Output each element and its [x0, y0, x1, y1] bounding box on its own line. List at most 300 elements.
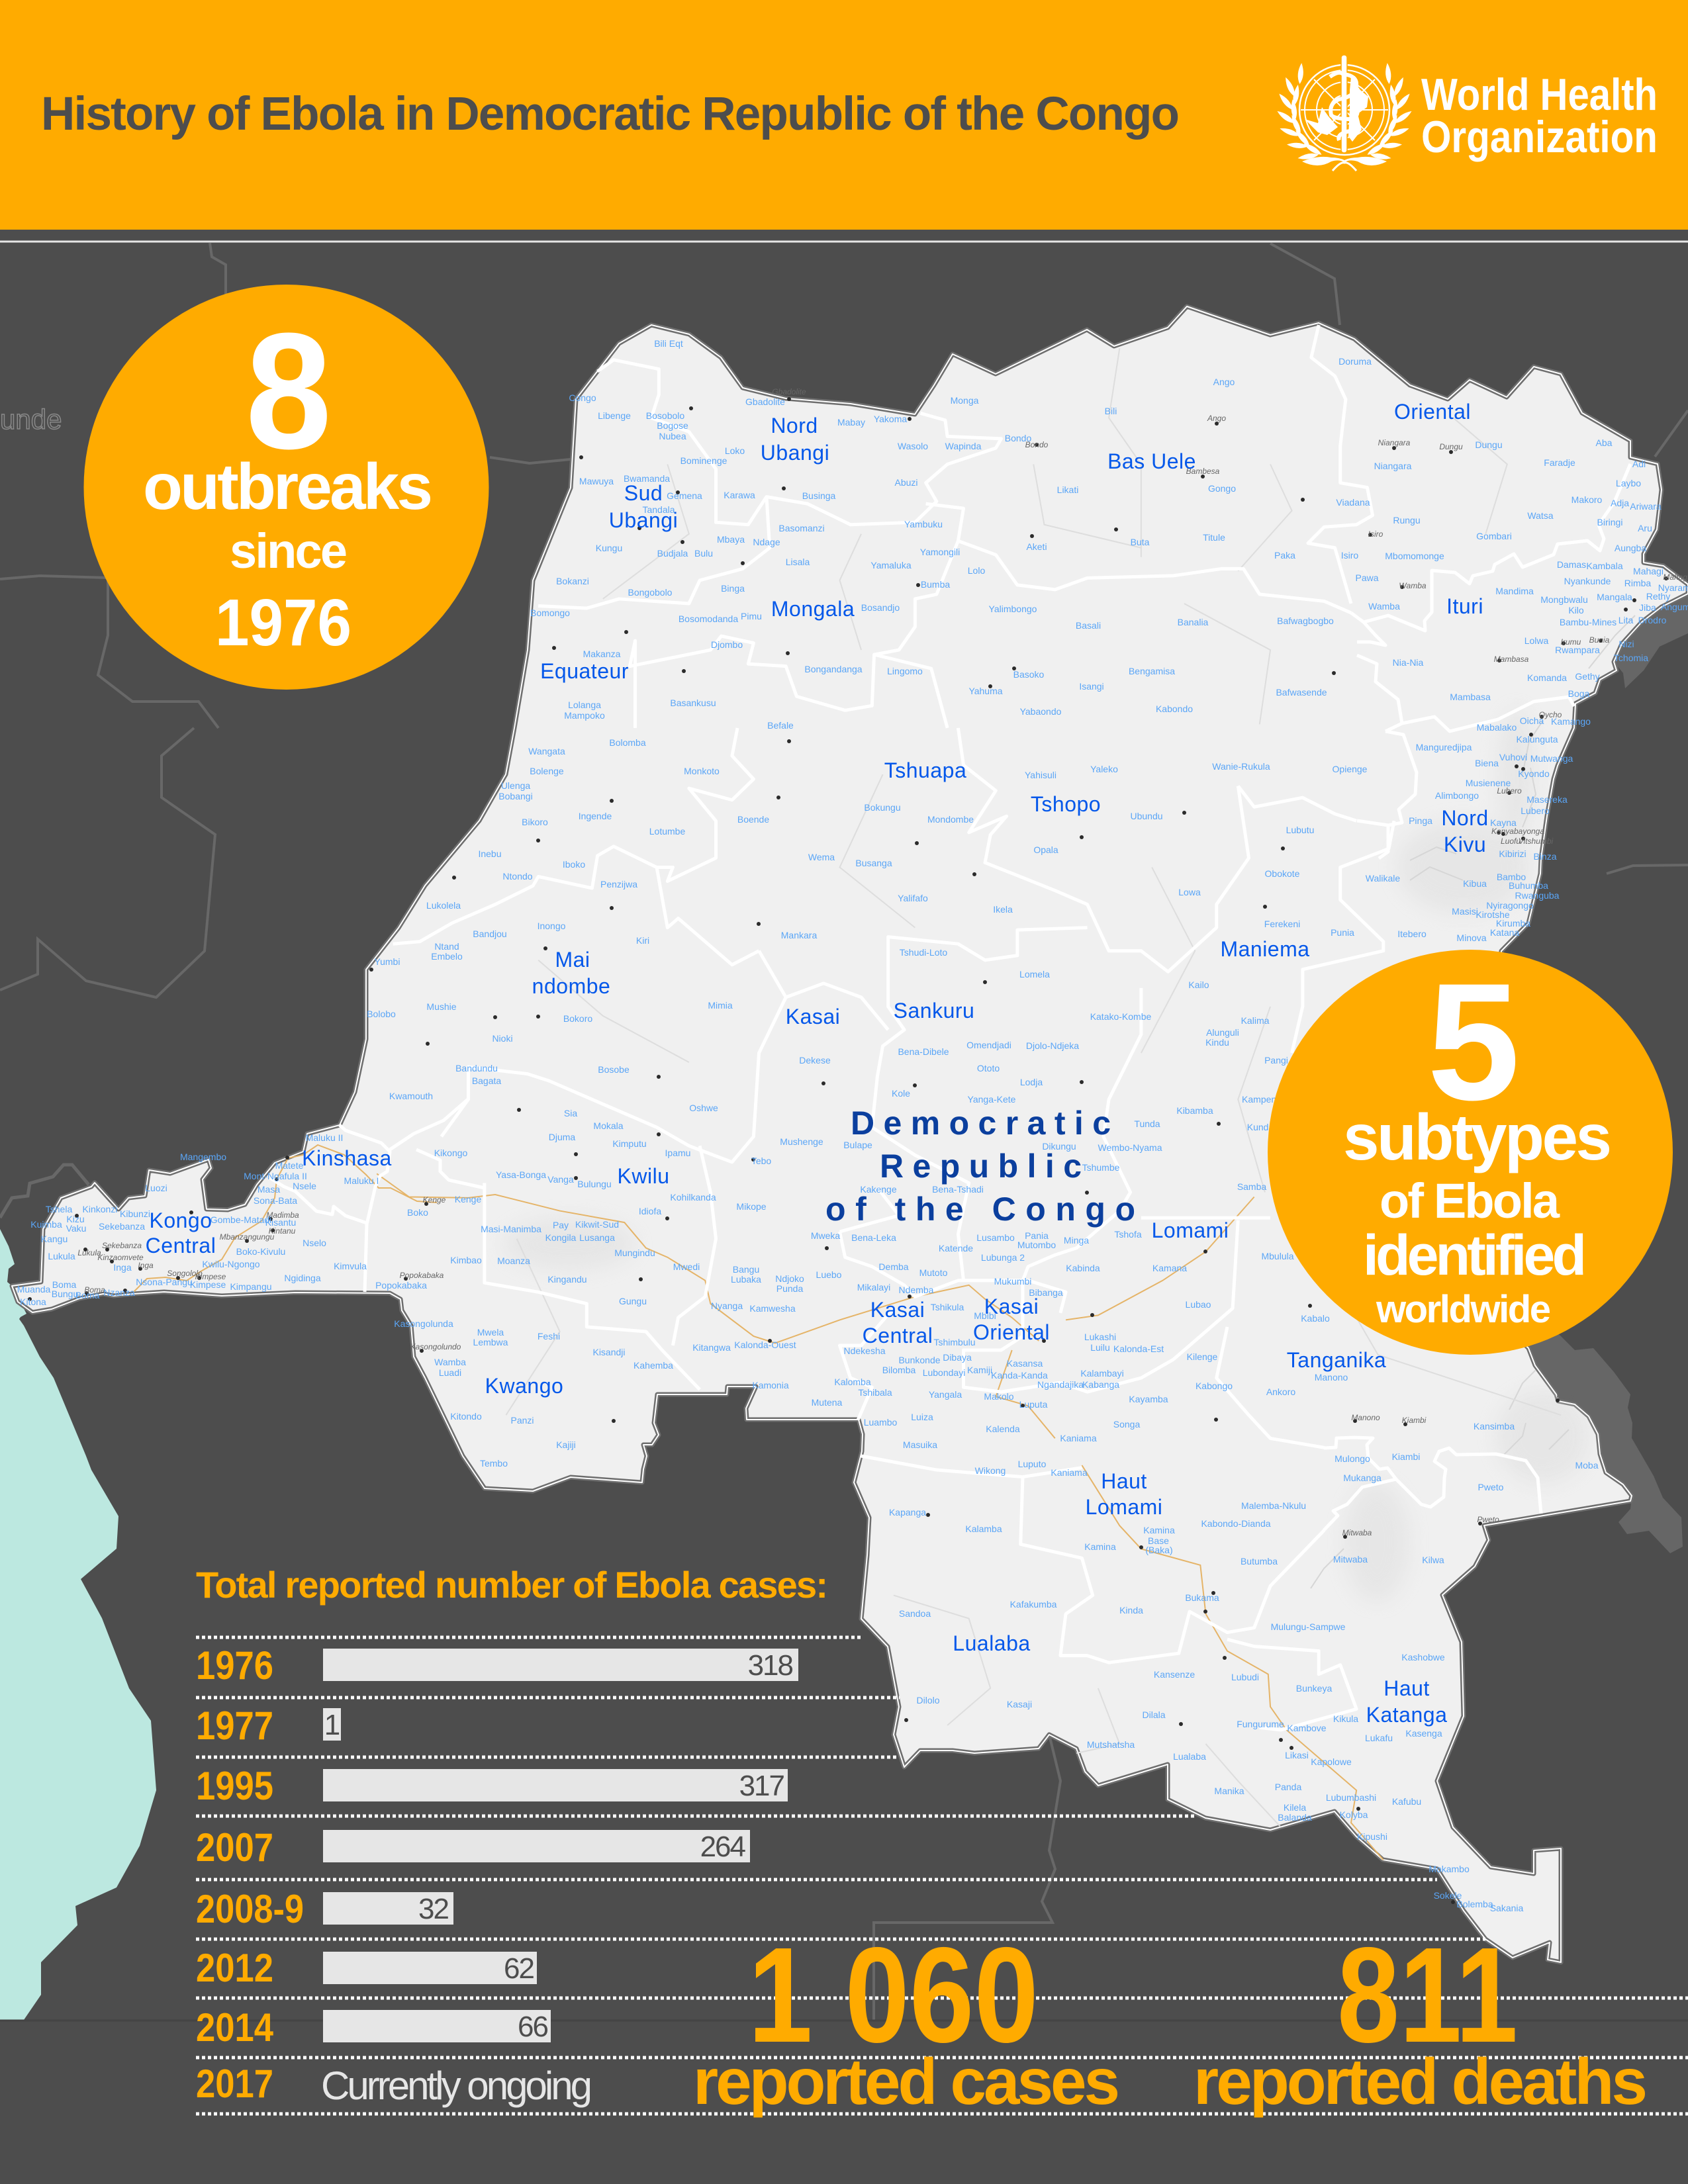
town name captions: Lubero	[1497, 786, 1522, 796]
province name labels: Kwango	[485, 1374, 563, 1398]
territory town labels: Bandundu	[455, 1063, 498, 1073]
province name labels: Bas Uele	[1107, 449, 1196, 473]
territory town labels: Kapanga	[889, 1507, 926, 1518]
territory town labels: Bambu-Mines	[1560, 617, 1617, 627]
territory town labels: Titule	[1203, 532, 1225, 543]
territory town labels: Likati	[1057, 484, 1078, 495]
territory town labels: Lubao	[1186, 1299, 1211, 1310]
territory town labels: Kalunguta	[1516, 734, 1558, 745]
territory town labels: Mutombo	[1017, 1240, 1056, 1250]
territory town labels: Lubero	[1521, 805, 1550, 816]
territory town labels: Pawa	[1355, 572, 1379, 583]
territory town labels: Kizu	[66, 1214, 85, 1224]
province name labels: Ubangi	[761, 441, 829, 465]
territory town labels: Katako-Kombe	[1090, 1011, 1152, 1022]
territory town labels: Bafwagbogbo	[1277, 615, 1334, 626]
territory town labels: Tshimbulu	[933, 1337, 976, 1347]
province borders south	[861, 1456, 1356, 1730]
territory town labels: Kikongo	[434, 1148, 468, 1158]
town name captions: Kanyabayonga	[1491, 827, 1544, 836]
territory town labels: Makanza	[583, 649, 621, 659]
territory town labels: Boma	[75, 1290, 99, 1300]
territory town labels: Kabongo	[1196, 1381, 1233, 1391]
territory town labels: Nyankunde	[1564, 576, 1611, 586]
town name captions: Mitwaba	[1342, 1528, 1372, 1537]
territory town labels: Lingomo	[887, 666, 923, 676]
territory town labels: Lomela	[1019, 969, 1050, 979]
territory town labels: Kamiji	[967, 1365, 992, 1375]
territory town labels: Boko-Kivulu	[236, 1246, 285, 1257]
territory town labels: Oicha	[1520, 715, 1544, 726]
territory town labels: Bagata	[472, 1075, 501, 1086]
province name labels: Maniema	[1220, 937, 1310, 961]
territory town labels: Alimbongo	[1435, 790, 1479, 801]
territory town labels: Rimba	[1624, 578, 1651, 588]
territory town labels: Kisandji	[592, 1347, 626, 1357]
territory town labels: Bwamanda	[624, 473, 670, 484]
callout: 8 outbreaks: 1976	[215, 586, 352, 660]
province name labels: Tshopo	[1031, 792, 1101, 816]
territory town labels: Vuhovi	[1499, 752, 1527, 762]
territory town labels: Lubumbashi	[1326, 1792, 1376, 1803]
territory town labels: Luebo	[816, 1269, 842, 1280]
territory town labels: Mokambo	[1429, 1864, 1470, 1874]
territory town labels: Nizi	[1618, 639, 1634, 649]
territory town labels: Sia	[564, 1108, 577, 1118]
territory town labels: Bosobe	[598, 1064, 630, 1075]
territory town labels: Kolyba	[1340, 1809, 1368, 1820]
territory town labels: Bosobolo	[646, 410, 684, 421]
territory town labels: Panda	[1275, 1782, 1301, 1792]
icon: WHO emblem	[1276, 55, 1413, 171]
row 1976	[196, 1643, 798, 1688]
territory town labels: Kwamouth	[389, 1091, 433, 1101]
territory town labels: Lisala	[786, 557, 810, 567]
territory town labels: Masi-Manimba	[481, 1224, 541, 1234]
map: Atlantic ocean	[0, 1229, 156, 2020]
territory town labels: Kambove	[1287, 1723, 1327, 1733]
territory town labels: Alunguli	[1206, 1027, 1239, 1038]
territory town labels: Demba	[878, 1261, 909, 1272]
town name captions: Mbanzangungu	[220, 1232, 275, 1242]
row 2007: 264	[700, 1831, 746, 1863]
territory town labels: Bukama	[1185, 1592, 1219, 1603]
territory town labels: Wasolo	[898, 441, 928, 451]
total reported cases: 1 060	[748, 1919, 1039, 2071]
territory town labels: Lukolela	[426, 900, 461, 911]
territory town labels: Kayamba	[1129, 1394, 1168, 1404]
territory town labels: Lowa	[1178, 887, 1201, 897]
province name labels: Nord	[771, 414, 818, 437]
territory town labels: Pweto	[1478, 1482, 1504, 1492]
territory town labels: Buta	[1131, 537, 1150, 547]
territory town labels: Kiambi	[1392, 1451, 1420, 1462]
territory town labels: Tshudi-Loto	[900, 947, 947, 958]
province name labels: Ubangi	[609, 508, 678, 532]
territory town labels: Bungu	[52, 1289, 78, 1299]
territory town labels: Yangala	[929, 1389, 962, 1400]
territory town labels: Itebero	[1397, 929, 1427, 939]
territory town labels: Rwanguba	[1515, 890, 1560, 901]
town name captions: Songololo	[167, 1269, 203, 1278]
territory town labels: Sokele	[1434, 1890, 1462, 1901]
row 2012	[196, 1946, 537, 1990]
territory town labels: Malemba-Nkulu	[1241, 1500, 1306, 1511]
territory town labels: Djolo-Ndjeka	[1026, 1040, 1079, 1051]
territory town labels: Kanda-Kanda	[991, 1370, 1048, 1381]
province name labels: Lomami	[1152, 1218, 1229, 1242]
province name labels: Oriental	[1394, 400, 1471, 424]
territory town labels: Ndjoko	[775, 1273, 804, 1284]
relief shading in the east	[503, 615, 1635, 1602]
territory town labels: Bokungu	[864, 802, 901, 813]
territory town labels: Ferekeni	[1264, 919, 1300, 929]
territory town labels: Rungu	[1393, 515, 1421, 525]
territory town labels: Bilomba	[882, 1365, 915, 1375]
territory town labels: Kakenge	[860, 1184, 897, 1195]
territory town labels: Mangala	[1597, 592, 1632, 602]
territory town labels: Mambasa	[1450, 692, 1491, 702]
territory town labels: Kansenze	[1154, 1669, 1195, 1680]
territory town labels: Kisantu	[265, 1217, 296, 1228]
territory town labels: Kasaji	[1007, 1699, 1032, 1709]
territory town labels: Moanza	[497, 1255, 530, 1266]
territory town labels: Isiro	[1341, 550, 1358, 561]
territory town labels: Kenge	[455, 1194, 481, 1205]
territory town labels: Damas	[1557, 559, 1586, 570]
province name labels: Kwilu	[618, 1164, 669, 1188]
row 1976: 1976	[196, 1643, 273, 1688]
territory town labels: Bikoro	[522, 817, 548, 827]
territory town labels: Mutena	[812, 1397, 843, 1408]
territory town labels: Boko	[407, 1207, 428, 1218]
map: lake Tanganyika and lake Mweru	[1523, 1317, 1683, 1553]
territory town labels: Yahuma	[968, 686, 1003, 696]
territory town labels: Tembo	[480, 1458, 508, 1469]
territory town labels: Isangi	[1079, 681, 1104, 692]
territory town labels: Lubutu	[1286, 825, 1314, 835]
territory town labels: Kibua	[1463, 878, 1487, 889]
territory town labels: Mwela	[477, 1327, 504, 1338]
territory town labels: Kaniama	[1060, 1433, 1097, 1443]
territory town labels: Kalima	[1241, 1015, 1270, 1026]
territory town labels: Makolo	[984, 1391, 1014, 1402]
town name captions: Dungu	[1439, 442, 1463, 451]
territory town labels: Adi	[1632, 459, 1646, 469]
territory town labels: Bambo	[1497, 872, 1526, 882]
territory town labels: Befale	[767, 720, 794, 731]
territory town labels: Minova	[1456, 933, 1487, 943]
territory town labels: Lubudi	[1231, 1672, 1259, 1682]
territory town labels: Bena-Dibele	[898, 1046, 949, 1057]
WHO wordmark	[1421, 69, 1658, 162]
territory town labels: Punda	[776, 1283, 803, 1294]
row 2014: 2014	[196, 2005, 274, 2050]
territory town labels: Banalia	[1178, 617, 1209, 627]
territory town labels: Bolenge	[530, 766, 564, 776]
territory town labels: Ntondo	[502, 871, 533, 882]
territory town labels: Bulu	[694, 548, 713, 559]
bar chart heading: Total reported number of Ebola cases:	[196, 1564, 828, 1606]
territory town labels: Lusanga	[579, 1232, 615, 1243]
territory town labels: Kamango	[1551, 716, 1591, 727]
province name labels: Kasai	[870, 1298, 925, 1322]
callout: 5 subtypes: identified	[1363, 1224, 1587, 1287]
territory town labels: Mampoko	[564, 710, 605, 721]
territory town labels: Komanda	[1527, 672, 1567, 683]
territory town labels: Mitwaba	[1333, 1554, 1368, 1565]
province name labels: Kasai	[984, 1295, 1039, 1318]
territory town labels: Kongila	[545, 1232, 577, 1243]
territory town labels: Mimia	[708, 1000, 733, 1011]
territory town labels: Yasa-Bonga	[496, 1169, 546, 1180]
territory town labels: Libenge	[598, 410, 631, 421]
territory town labels: Kilo	[1568, 605, 1584, 615]
territory town labels: Gungu	[619, 1296, 647, 1306]
territory town labels: Bominenge	[680, 455, 727, 466]
territory town labels: Kibamba	[1176, 1105, 1213, 1116]
territory town labels: Niangara	[1374, 461, 1412, 471]
territory town labels: Iboko	[563, 859, 585, 870]
territory town labels: Kole	[892, 1088, 910, 1099]
territory town labels: Tandala	[642, 504, 675, 515]
town name captions: Sekebanza	[102, 1241, 142, 1250]
town name captions: Bambesa	[1186, 467, 1220, 476]
territory town labels: Mawuya	[579, 476, 614, 486]
callout: 5 subtypes: worldwide	[1376, 1288, 1551, 1331]
territory town labels: Ndage	[753, 537, 780, 547]
territory town labels: Bumba	[921, 579, 950, 590]
territory town labels: Yamongili	[920, 547, 960, 557]
territory town labels: Ingende	[579, 811, 612, 821]
territory town labels: Kitona	[20, 1297, 46, 1307]
territory town labels: Kohilkanda	[670, 1192, 716, 1203]
territory town labels: Luputo	[1018, 1459, 1047, 1469]
row 1995	[196, 1764, 788, 1808]
territory town labels: Nselo	[303, 1238, 326, 1248]
town name captions: Boma	[84, 1285, 105, 1295]
territory town labels: Kashobwe	[1401, 1652, 1445, 1662]
territory town labels: Kabanga	[1082, 1379, 1119, 1390]
town name captions: Kintanu	[269, 1226, 296, 1236]
territory town labels: Kindu	[1205, 1037, 1229, 1048]
territory town labels: Mikope	[736, 1201, 767, 1212]
territory town labels: Bena-Leka	[851, 1232, 896, 1243]
territory town labels: Ndekesha	[843, 1345, 886, 1356]
territory town labels: Yakoma	[874, 414, 907, 424]
territory town labels: Bondo	[1005, 433, 1031, 443]
territory town labels: Viadana	[1336, 497, 1370, 508]
province name labels: ndombe	[532, 974, 610, 998]
territory town labels: Sona-Bata	[254, 1195, 297, 1206]
territory town labels: Luputa	[1019, 1399, 1048, 1410]
territory town labels: Ntand	[434, 941, 459, 952]
territory town labels: Mulongo	[1335, 1453, 1370, 1464]
total reported cases: reported cases	[693, 2045, 1120, 2118]
territory town labels: Kabalo	[1301, 1313, 1330, 1324]
territory town labels: Rwampara	[1555, 645, 1600, 655]
country name label: Democratic	[851, 1105, 1111, 1142]
territory town labels: Mbaya	[717, 534, 745, 545]
territory town labels: Ariwara	[1630, 501, 1662, 512]
territory town labels: Djuma	[549, 1132, 575, 1142]
territory town labels: Buhumba	[1509, 880, 1548, 891]
territory town labels: Kamonia	[752, 1380, 789, 1390]
territory town labels: Doruma	[1338, 356, 1372, 367]
province name labels: Haut	[1101, 1469, 1147, 1493]
territory town labels: Gombari	[1476, 531, 1512, 541]
territory town labels: Bongobolo	[628, 587, 673, 598]
territory town labels: Pangi	[1264, 1055, 1288, 1066]
territory town labels: Kibirizi	[1499, 848, 1526, 859]
town name captions: Isiro	[1368, 529, 1383, 539]
territory town labels: Vanga	[547, 1174, 574, 1185]
town name captions: Kiambi	[1402, 1416, 1427, 1425]
territory town labels: Aba	[1596, 437, 1613, 448]
territory town labels: Bolemba	[1456, 1899, 1493, 1909]
town name captions: Irumu	[1561, 637, 1581, 647]
territory town labels: Kamwesha	[749, 1303, 796, 1314]
town name captions: Lukula	[77, 1248, 101, 1257]
province name labels: Sud	[624, 481, 663, 505]
territory town labels: Lukula	[48, 1251, 75, 1261]
faint territory lines	[603, 348, 1507, 724]
province name labels: Central	[146, 1234, 216, 1257]
territory town labels: Bafwasende	[1276, 687, 1327, 698]
territory town labels: Kungu	[596, 543, 622, 553]
territory town labels: Lolanga	[568, 700, 601, 710]
territory town labels: Kansimba	[1474, 1421, 1515, 1432]
territory town labels: Boma	[52, 1279, 76, 1290]
territory town labels: Wembo-Nyama	[1098, 1142, 1162, 1153]
territory town labels: Lualaba	[1173, 1751, 1206, 1762]
territory town labels: Kafubu	[1392, 1796, 1421, 1807]
territory town labels: Drodro	[1638, 615, 1667, 625]
territory town labels: Mweka	[811, 1230, 840, 1241]
territory town labels: Kinda	[1119, 1605, 1143, 1615]
territory town labels: Adja	[1611, 498, 1629, 508]
territory town labels: Basali	[1076, 620, 1101, 631]
territory town labels: Mutshatsha	[1087, 1739, 1135, 1750]
territory town labels: Lodja	[1020, 1077, 1043, 1087]
territory town labels: Mulungu-Sampwe	[1271, 1621, 1346, 1632]
territory town labels: Faradje	[1544, 457, 1575, 468]
territory town labels: Mokala	[593, 1120, 624, 1131]
territory town labels: Katende	[939, 1243, 973, 1253]
territory town labels: Moba	[1575, 1460, 1599, 1471]
territory town labels: Masereka	[1526, 794, 1568, 805]
province borders centre	[393, 728, 1394, 1447]
territory town labels: Ankoro	[1266, 1387, 1295, 1397]
row 2008-9: 32	[418, 1893, 449, 1925]
territory town labels: Boende	[737, 814, 769, 825]
territory town labels: Lubondayi	[923, 1367, 965, 1378]
territory town labels: Pay	[553, 1220, 569, 1230]
territory town labels: Watsa	[1527, 510, 1554, 521]
territory town labels: Paka	[1274, 550, 1295, 561]
row 1995: 317	[739, 1770, 784, 1802]
province name labels: Katanga	[1366, 1703, 1447, 1727]
territory town labels: Gbadolite	[745, 396, 785, 407]
province name labels: Ituri	[1446, 594, 1483, 618]
territory town labels: Bulungu	[577, 1179, 612, 1189]
town name captions: Pweto	[1477, 1515, 1499, 1524]
territory town labels: Kimbao	[450, 1255, 482, 1265]
territory town labels: Lolo	[968, 565, 985, 576]
territory town labels: Wanie-Rukula	[1212, 761, 1270, 772]
territory town labels: Yaleko	[1090, 764, 1118, 774]
territory town labels: Maluku I	[344, 1175, 379, 1186]
territory town labels: Mandima	[1495, 586, 1534, 596]
territory town labels: Binga	[721, 583, 745, 594]
row 1977: 1977	[196, 1704, 273, 1748]
territory town labels: Kunda	[1247, 1122, 1274, 1132]
province name labels	[146, 400, 1489, 1727]
territory town labels: Businga	[802, 490, 836, 501]
territory town labels: Base	[1148, 1535, 1169, 1546]
territory town labels: Jiba	[1639, 602, 1656, 613]
town name captions: Mambasa	[1494, 655, 1529, 664]
territory town labels: Kilela	[1284, 1802, 1306, 1813]
territory town labels: Idiofa	[639, 1206, 661, 1216]
town name captions: Madimba	[266, 1210, 299, 1220]
territory town labels: Kimvula	[334, 1261, 367, 1271]
territory town labels: Penzijwa	[600, 879, 637, 889]
territory town labels: Mahagi	[1633, 566, 1664, 576]
territory town labels: Mankara	[781, 930, 817, 940]
territory town labels: Masisi	[1452, 906, 1478, 917]
territory town labels: Mushenge	[780, 1136, 823, 1147]
territory town labels: Bena-Tshadi	[932, 1184, 984, 1195]
territory town labels: Yahisuli	[1025, 770, 1056, 780]
territory town labels: Kimpangu	[230, 1281, 272, 1292]
territory town labels: Ototo	[977, 1063, 1000, 1073]
territory town labels: Aru	[1638, 523, 1652, 533]
territory town labels: Matete	[275, 1160, 304, 1171]
territory town labels: Lukashi	[1084, 1332, 1116, 1342]
row 1976: 318	[748, 1649, 793, 1682]
territory town labels: Manguredjipa	[1416, 742, 1472, 752]
territory town labels: Lusambo	[976, 1232, 1015, 1243]
territory town labels: Musienene	[1466, 778, 1511, 788]
territory town labels: Kamina	[1084, 1541, 1116, 1552]
territory town labels: Kambala	[1586, 561, 1623, 571]
header banner	[0, 0, 1688, 242]
town name captions: Kenge	[423, 1195, 446, 1205]
territory town labels: Lembwa	[473, 1337, 508, 1347]
territory town labels: Kangu	[41, 1234, 68, 1244]
territory town labels: Kipushi	[1357, 1831, 1387, 1842]
territory town labels: Tebo	[751, 1156, 771, 1166]
territory town labels: (Baka)	[1145, 1545, 1173, 1555]
row 2008-9	[196, 1887, 453, 1931]
territory town labels: Maluku II	[306, 1132, 343, 1143]
territory town labels: Kuimba	[30, 1219, 62, 1230]
territory town labels: Kikula	[1333, 1713, 1358, 1724]
row 2014: 66	[518, 2011, 548, 2043]
territory town labels: Bolomba	[609, 737, 646, 748]
province name labels: Kivu	[1444, 833, 1486, 856]
territory town labels: Inga	[113, 1262, 132, 1273]
territory town labels: Luadi	[439, 1367, 461, 1378]
territory town labels: Mukanga	[1343, 1473, 1382, 1483]
territory town labels: Bunkeya	[1296, 1683, 1332, 1694]
territory town labels: Panzi	[510, 1415, 534, 1426]
territory town labels: Ubundu	[1130, 811, 1163, 821]
territory town labels: Manono	[1315, 1372, 1348, 1383]
territory town labels: Kalenda	[986, 1424, 1020, 1434]
row 2017: 2017	[196, 2062, 273, 2106]
